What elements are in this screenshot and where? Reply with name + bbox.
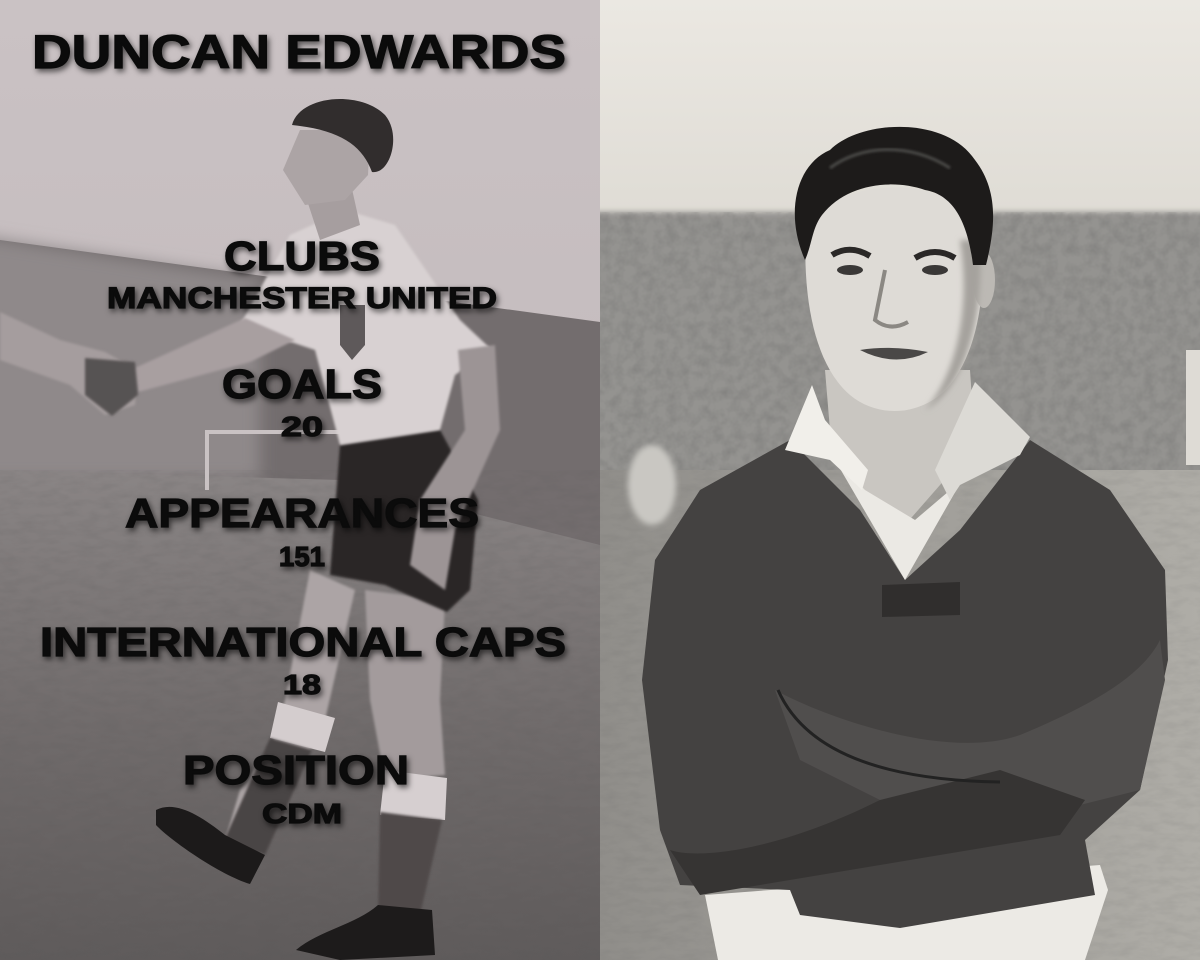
stat: goals: 20	[281, 411, 323, 442]
stat: position: CDM	[262, 798, 342, 829]
left boot	[156, 807, 265, 884]
stat: international caps: 18	[283, 669, 321, 700]
goal frame	[207, 432, 340, 490]
arm towards handshake	[135, 318, 295, 392]
stat: appearances: 151	[279, 541, 325, 572]
crossed forearm lower	[670, 770, 1085, 895]
distant figure	[628, 445, 676, 525]
clasped hands	[85, 358, 138, 416]
collar left	[785, 385, 868, 490]
shorts	[705, 865, 1108, 960]
eyes	[832, 250, 955, 258]
shirt	[240, 210, 492, 445]
face	[805, 208, 980, 411]
stat: position	[183, 747, 409, 829]
right leg	[365, 590, 445, 780]
stat: goals: GOALS	[222, 361, 382, 407]
other player's arm and handshake	[0, 312, 138, 415]
nose	[875, 270, 908, 327]
player figure	[135, 99, 500, 960]
crest	[340, 305, 365, 360]
ear	[976, 254, 995, 308]
title: DUNCAN EDWARDS	[32, 25, 566, 78]
undershirt	[841, 470, 955, 580]
neck	[825, 370, 975, 525]
panel: faded action photo	[0, 0, 600, 960]
fold shadow	[778, 690, 1000, 782]
stat: clubs: MANCHESTER UNITED	[107, 282, 497, 315]
shorts	[330, 430, 478, 612]
hair highlights	[830, 150, 950, 168]
portrait player	[642, 127, 1168, 960]
placket	[882, 582, 960, 617]
stat: clubs	[107, 233, 497, 315]
stat: position: POSITION	[183, 747, 409, 793]
goal post	[1186, 350, 1200, 465]
stat: international caps: INTERNATIONAL CAPS	[40, 619, 566, 665]
mouth	[860, 348, 928, 360]
left leg	[222, 570, 355, 855]
collar right	[935, 382, 1030, 500]
panel: portrait photo	[580, 0, 1200, 960]
stat: appearances	[125, 490, 479, 572]
jersey	[642, 440, 1168, 928]
crossed forearm upper	[775, 640, 1165, 810]
neck and head	[308, 192, 360, 240]
right arm	[410, 345, 500, 590]
stat: clubs: CLUBS	[224, 233, 380, 279]
stat: appearances: APPEARANCES	[125, 490, 479, 536]
face shading	[925, 240, 981, 410]
right boot	[296, 905, 435, 960]
hair	[795, 127, 993, 265]
stat: goals	[222, 361, 382, 442]
stat: international caps	[40, 619, 566, 700]
